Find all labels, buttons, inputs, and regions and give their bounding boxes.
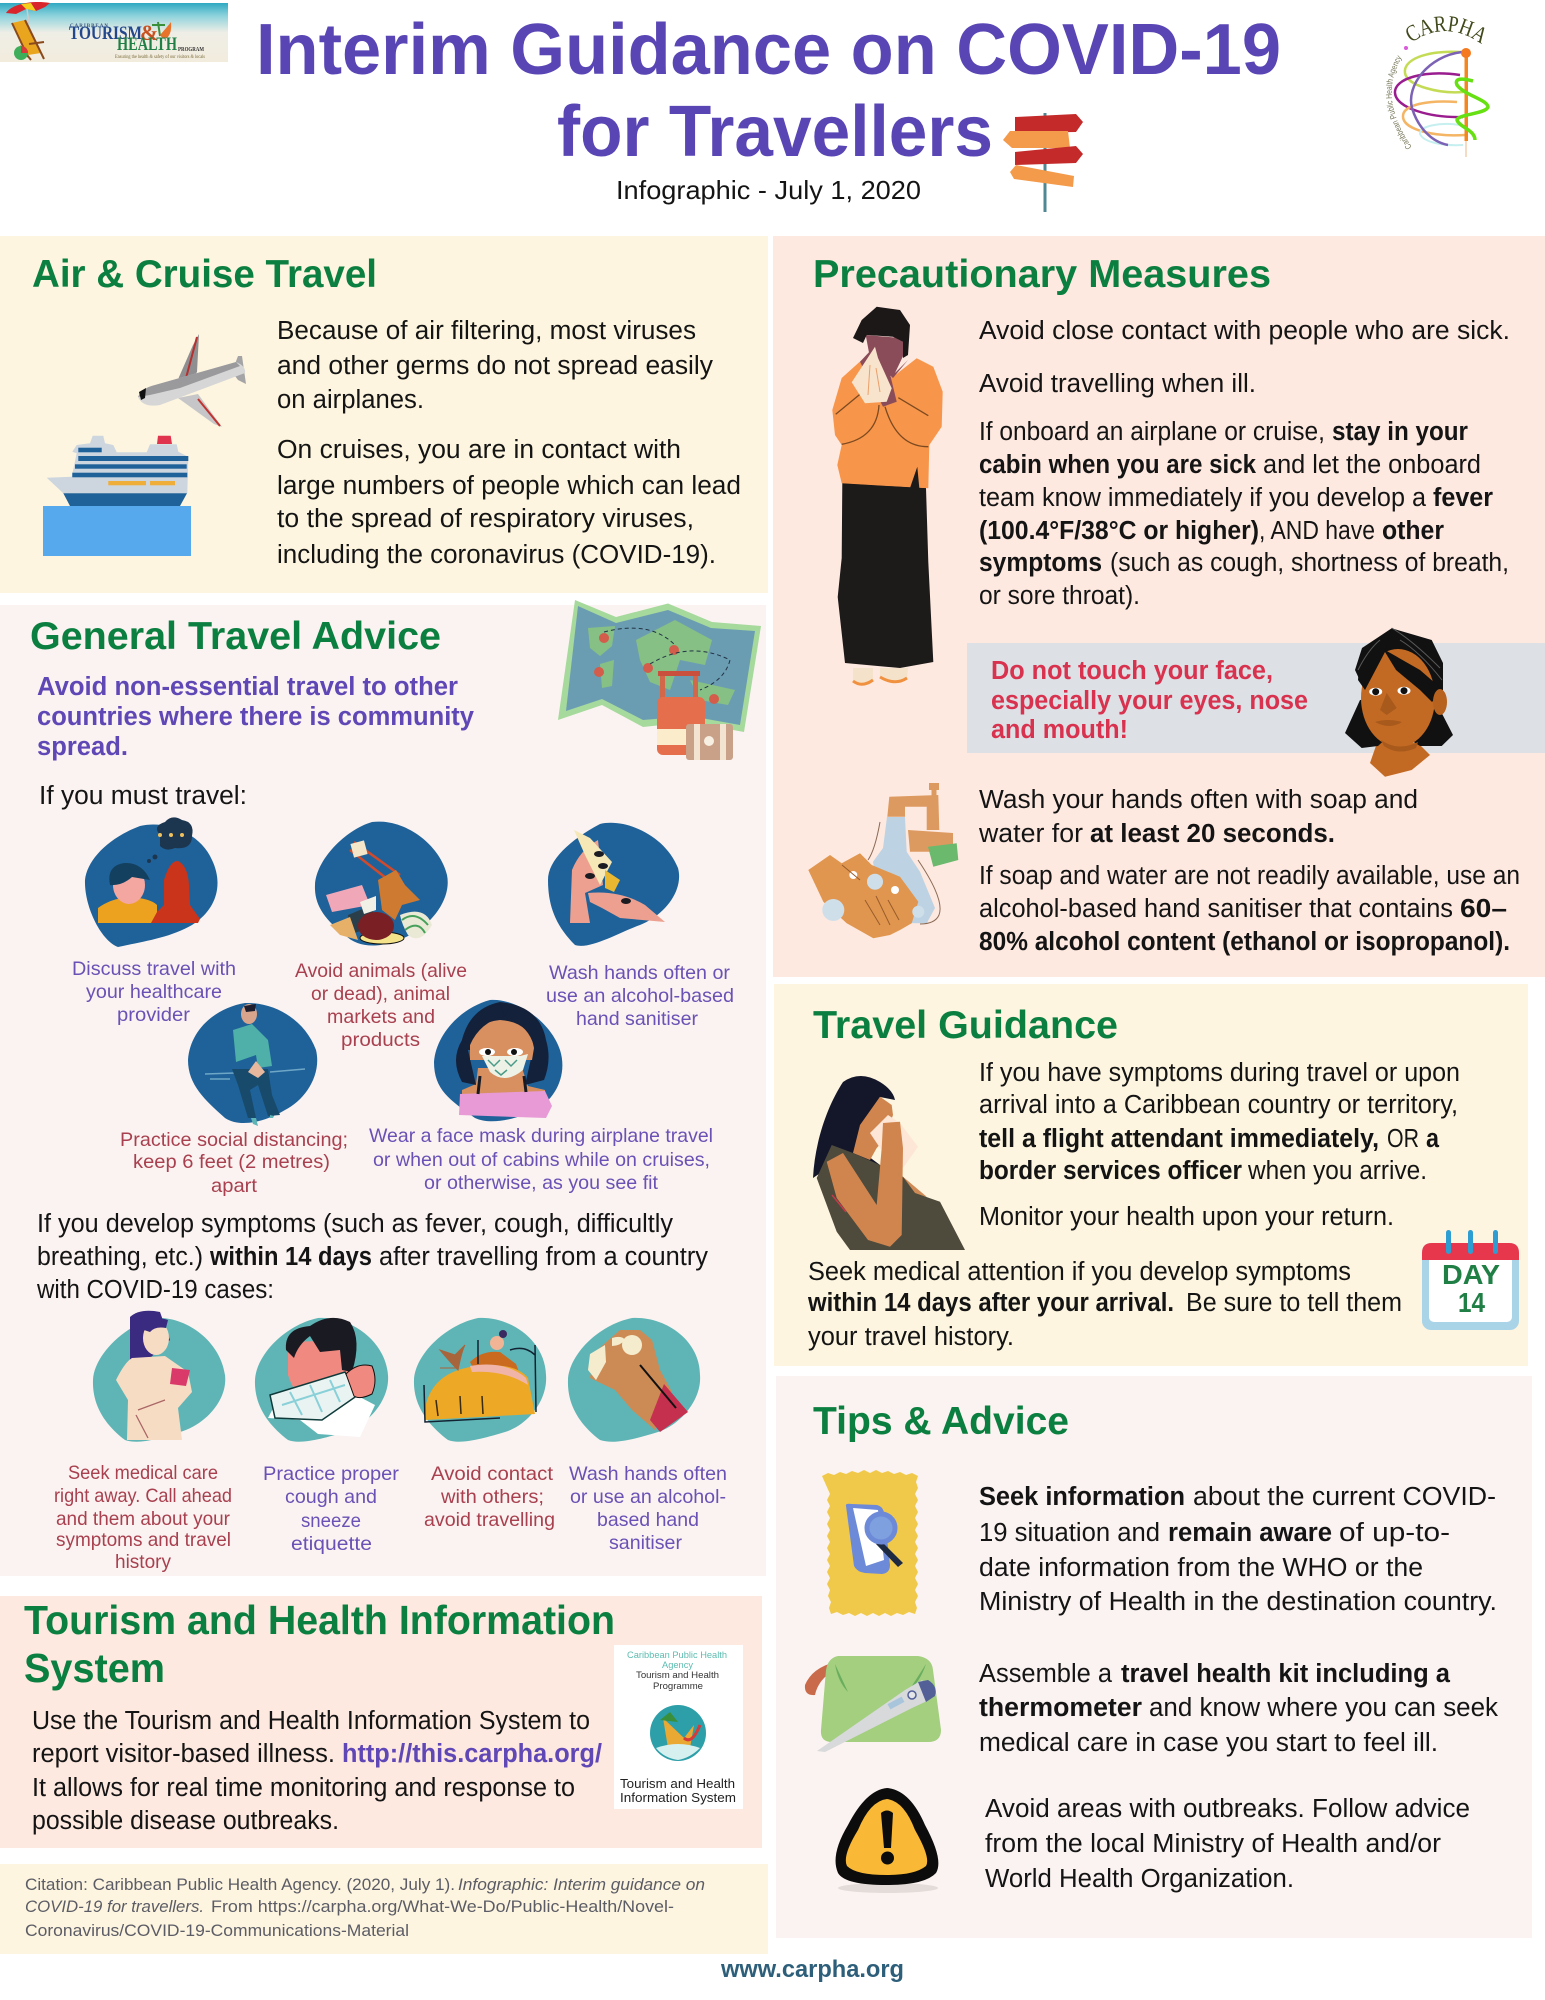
label: seek medical care bbox=[54, 1462, 232, 1573]
label: wash hands: Wash hands often or bbox=[549, 962, 731, 984]
panel: citation: Infographic: Interim guidance on bbox=[458, 1875, 705, 1894]
text: avoid non-essential travel bbox=[37, 673, 475, 761]
icon: woman face bbox=[1345, 628, 1453, 777]
heading bbox=[24, 1597, 615, 1691]
text: report illness: report visitor-based illness. bbox=[32, 1740, 335, 1768]
text: wash hands: water for bbox=[978, 820, 1084, 848]
text: health kit: and know where you can seek bbox=[1149, 1694, 1498, 1722]
text: if you must travel: If you must travel: bbox=[39, 782, 247, 810]
icon: wash hands sanitiser bbox=[548, 823, 679, 946]
panel: Travel Guidance bbox=[774, 984, 1528, 1366]
logo: CARPHA: CARPHA bbox=[1406, 16, 1484, 44]
text: symptoms during travel: when you arrive. bbox=[1247, 1157, 1427, 1185]
text: onboard advice: or sore throat). bbox=[979, 582, 1140, 610]
text: health kit bbox=[979, 1660, 1498, 1757]
text: seek information bbox=[979, 1483, 1497, 1616]
icon: warning sign bbox=[836, 1788, 938, 1893]
icon: social distancing bbox=[188, 1003, 317, 1126]
text: onboard advice: team know immediately if you develop a bbox=[979, 484, 1427, 512]
label: wash hands often: sanitiser bbox=[609, 1532, 682, 1554]
text: if you develop symptoms: after travelling from a country bbox=[379, 1243, 708, 1271]
text: sanitiser bbox=[979, 862, 1520, 956]
text: air filtering: on airplanes. bbox=[277, 386, 424, 414]
heading: Travel Guidance bbox=[813, 1004, 1118, 1047]
text: avoid outbreaks: World Health Organization. bbox=[985, 1865, 1294, 1893]
logo card: Tourism and Health Information System: Information System bbox=[620, 1790, 736, 1805]
icon: signpost bbox=[1003, 113, 1083, 212]
text: health kit: thermometer bbox=[979, 1694, 1142, 1722]
logo: Tourism and Health Program: Ensuring the health & safety of our visitors & locals bbox=[115, 55, 205, 60]
label: seek medical care: right away. Call ahead bbox=[54, 1485, 232, 1507]
label: avoid animals bbox=[295, 960, 467, 1051]
text: seek information: about the current COVID- bbox=[1193, 1483, 1496, 1511]
panel: citation: Citation: Caribbean Public Health Agency. (2020, July 1). bbox=[25, 1875, 455, 1894]
text: sanitiser: If soap and water are not readily available, use an bbox=[979, 862, 1520, 890]
text: if you develop symptoms: with COVID-19 cases: bbox=[36, 1276, 274, 1304]
heading: Precautionary Measures bbox=[813, 253, 1271, 296]
label: social distancing bbox=[120, 1129, 348, 1197]
label: discuss: provider bbox=[117, 1004, 191, 1026]
label: wash hands often: or use an alcohol- bbox=[570, 1486, 726, 1508]
text: onboard advice: , AND have bbox=[1259, 517, 1375, 545]
panel: Tourism and Health Information System bbox=[0, 1596, 762, 1848]
logo: Tourism and Health Program: PROGRAM bbox=[178, 47, 204, 53]
label: avoid animals: products bbox=[341, 1029, 420, 1051]
text: symptoms during travel: If you have symptoms during travel or upon bbox=[979, 1059, 1460, 1087]
text: onboard advice: cabin when you are sick bbox=[979, 451, 1257, 479]
label: wash hands often: based hand bbox=[597, 1509, 699, 1531]
panel: citation: Coronavirus/COVID-19-Communications-Material bbox=[25, 1921, 409, 1940]
callout: do not touch your face: and mouth! bbox=[991, 716, 1128, 744]
text: symptoms during travel bbox=[979, 1059, 1460, 1185]
label: face mask bbox=[369, 1125, 713, 1194]
icon: discuss with provider bbox=[85, 817, 218, 947]
icon: seek medical care bbox=[93, 1311, 225, 1442]
icon: person sneezing into tissue bbox=[832, 307, 943, 684]
icon: face mask bbox=[434, 1000, 562, 1121]
heading: Tourism and Health Information bbox=[24, 1597, 615, 1643]
label: wash hands: use an alcohol-based bbox=[546, 985, 734, 1007]
text: onboard advice bbox=[979, 418, 1509, 610]
label: seek medical care: history bbox=[115, 1551, 171, 1573]
text: if you develop symptoms bbox=[36, 1210, 708, 1304]
label: social distancing: Practice social distancing; bbox=[120, 1129, 348, 1151]
label: avoid contact: with others; bbox=[440, 1486, 544, 1508]
text: health kit: travel health kit including a bbox=[1121, 1660, 1451, 1688]
label: cough etiquette: sneeze bbox=[301, 1510, 361, 1532]
label: face mask: or when out of cabins while on cruises, bbox=[373, 1149, 710, 1171]
text: onboard advice: other bbox=[1382, 517, 1444, 545]
text: symptoms during travel: border services officer bbox=[979, 1157, 1242, 1185]
callout: do not touch your face: especially your eyes, nose bbox=[991, 687, 1308, 715]
text: seek information: of up-to- bbox=[1339, 1519, 1450, 1547]
logo card: Tourism and Health Information System: Caribbean Public Health bbox=[627, 1650, 727, 1661]
text: if you develop symptoms: If you develop symptoms (such as fever, cough, difficultly bbox=[37, 1210, 673, 1238]
label: avoid animals: or dead), animal bbox=[311, 983, 450, 1005]
panel: citation: COVID-19 for travellers. bbox=[25, 1897, 204, 1916]
icon: day 14 calendar bbox=[1422, 1230, 1519, 1330]
icon: phone and magnifier bbox=[822, 1470, 918, 1616]
text: seek information: 19 situation and bbox=[979, 1519, 1160, 1547]
text: sanitiser: 60– bbox=[1460, 895, 1507, 923]
label: discuss: Discuss travel with bbox=[72, 958, 236, 980]
label: avoid contact: avoid travelling bbox=[424, 1509, 555, 1531]
panel: General Travel Advice bbox=[0, 600, 766, 1576]
panel: Air & Cruise Travel bbox=[0, 236, 768, 593]
text: seek information: Ministry of Health in the destination country. bbox=[979, 1588, 1497, 1616]
text: seek information: remain aware bbox=[1168, 1519, 1332, 1547]
text: cruises: to the spread of respiratory viruses, bbox=[277, 505, 694, 533]
heading: System bbox=[24, 1645, 165, 1691]
label: seek medical care: Seek medical care bbox=[68, 1462, 218, 1484]
text: cruises: including the coronavirus (COVID-19). bbox=[277, 541, 716, 569]
logo: Tourism and Health Program bbox=[0, 2, 228, 62]
logo: CARPHA: Caribbean Public Health Agency bbox=[1386, 55, 1411, 150]
logo: CARPHA bbox=[1386, 16, 1490, 157]
panel: Tips & Advice bbox=[776, 1376, 1532, 1938]
label: cough etiquette: cough and bbox=[285, 1486, 377, 1508]
heading: Tips & Advice bbox=[813, 1400, 1069, 1443]
text: health kit: Assemble a bbox=[979, 1660, 1113, 1688]
callout: do not touch your face bbox=[967, 643, 1545, 753]
text: health kit: medical care in case you start to feel ill. bbox=[979, 1729, 1438, 1757]
text: monitor health: Monitor your health upon your return. bbox=[979, 1203, 1394, 1231]
text: sanitiser: alcohol-based hand sanitiser that contains bbox=[979, 895, 1453, 923]
text: seek medical attention: your travel history. bbox=[808, 1323, 1014, 1351]
text: if you develop symptoms: within 14 days bbox=[209, 1243, 372, 1271]
icon: cruise ship bbox=[47, 436, 188, 506]
label: wash hands bbox=[546, 962, 734, 1030]
text: cruises bbox=[277, 436, 741, 569]
logo card: Tourism and Health Information System bbox=[614, 1645, 743, 1809]
text: seek medical attention: Seek medical attention if you develop symptoms bbox=[808, 1258, 1351, 1286]
text: symptoms during travel: a bbox=[1426, 1125, 1440, 1153]
panel: citation bbox=[0, 1864, 768, 1954]
text: avoid outbreaks: from the local Ministry of Health and/or bbox=[985, 1830, 1442, 1858]
label: social distancing: keep 6 feet (2 metres) bbox=[133, 1151, 330, 1173]
heading: General Travel Advice bbox=[30, 615, 441, 658]
text: report illness: It allows for real time monitoring and response to bbox=[32, 1774, 575, 1802]
text: avoid non-essential travel: spread. bbox=[37, 733, 128, 761]
label: face mask: Wear a face mask during airplane travel bbox=[369, 1125, 713, 1147]
label: avoid contact bbox=[424, 1463, 555, 1531]
text: report illness bbox=[32, 1707, 602, 1835]
logo card: Tourism and Health Information System: Agency bbox=[662, 1660, 693, 1671]
label: wash hands often: Wash hands often bbox=[569, 1463, 727, 1485]
text: seek medical attention bbox=[807, 1258, 1402, 1351]
icon: sea bbox=[43, 506, 191, 556]
text: symptoms during travel: OR bbox=[1387, 1125, 1419, 1153]
label: wash hands often bbox=[569, 1463, 727, 1554]
label: cough etiquette: etiquette bbox=[291, 1533, 372, 1555]
text: air filtering bbox=[277, 317, 713, 414]
text: report illness: possible disease outbreaks. bbox=[32, 1807, 339, 1835]
logo card: Tourism and Health Information System: Tourism and Health bbox=[636, 1670, 719, 1681]
text: sanitiser: 80% alcohol content (ethanol or isopropanol). bbox=[979, 928, 1510, 956]
icon: avoid animals bbox=[315, 822, 448, 946]
text: wash hands: Wash your hands often with soap and bbox=[979, 786, 1418, 814]
logo: Tourism and Health Program: HEALTH bbox=[117, 34, 177, 55]
text: avoid outbreaks: Avoid areas with outbreaks. Follow advice bbox=[985, 1795, 1470, 1823]
logo: Tourism and Health Program: & bbox=[140, 20, 158, 45]
icon: day 14 calendar: DAY bbox=[1442, 1259, 1500, 1290]
label: avoid contact: Avoid contact bbox=[431, 1463, 554, 1485]
icon: travel health kit with thermometer bbox=[805, 1656, 941, 1752]
text: symptoms during travel: arrival into a Caribbean country or territory, bbox=[979, 1091, 1458, 1119]
text: cruises: On cruises, you are in contact with bbox=[277, 436, 681, 464]
text: avoid travel: Avoid travelling when ill. bbox=[979, 370, 1256, 398]
heading: Air & Cruise Travel bbox=[32, 253, 377, 296]
label: avoid animals: Avoid animals (alive bbox=[295, 960, 467, 982]
text: onboard advice: symptoms bbox=[979, 549, 1102, 577]
label: face mask: or otherwise, as you see fit bbox=[424, 1172, 659, 1194]
subtitle: date: Infographic - July 1, 2020 bbox=[616, 175, 921, 205]
text: wash hands: at least 20 seconds. bbox=[1090, 820, 1335, 848]
label: cough etiquette bbox=[263, 1463, 400, 1555]
label: discuss bbox=[72, 958, 236, 1026]
label: wash hands: hand sanitiser bbox=[576, 1008, 698, 1030]
icon: world map and suitcases bbox=[558, 600, 761, 760]
label: discuss: your healthcare bbox=[86, 981, 222, 1003]
text: avoid non-essential travel: Avoid non-essential travel to other bbox=[37, 673, 458, 701]
text: report illness: Use the Tourism and Health Information System to bbox=[32, 1707, 590, 1735]
text: seek medical attention: within 14 days after your arrival. bbox=[807, 1289, 1174, 1317]
panel: Precautionary Measures bbox=[773, 236, 1545, 977]
text: onboard advice: and let the onboard bbox=[1263, 451, 1481, 479]
label: cough etiquette: Practice proper bbox=[263, 1463, 400, 1485]
label: seek medical care: symptoms and travel bbox=[56, 1529, 231, 1551]
icon: cough etiquette bbox=[255, 1318, 388, 1442]
text: air filtering: and other germs do not spread easily bbox=[277, 352, 713, 380]
text: onboard advice: If onboard an airplane or cruise, bbox=[979, 418, 1325, 446]
text: seek medical attention: Be sure to tell them bbox=[1186, 1289, 1402, 1317]
icon: avoid contact in bed bbox=[414, 1318, 546, 1442]
text: seek information: Seek information bbox=[979, 1483, 1185, 1511]
title: for Travellers bbox=[557, 92, 993, 172]
text: avoid outbreaks bbox=[985, 1795, 1470, 1893]
title: Interim Guidance on COVID-19 bbox=[256, 10, 1281, 90]
logo card: Tourism and Health Information System: Tourism and Health bbox=[620, 1776, 735, 1791]
icon: hand washing bbox=[808, 783, 958, 938]
icon: airplane bbox=[138, 334, 246, 427]
text: symptoms during travel: tell a flight attendant immediately, bbox=[979, 1125, 1379, 1153]
text: report illness: http://this.carpha.org/ bbox=[342, 1740, 602, 1768]
text: onboard advice: (such as cough, shortness of breath, bbox=[1110, 549, 1509, 577]
text: onboard advice: fever bbox=[1433, 484, 1493, 512]
title bbox=[256, 10, 1281, 172]
text: seek information: date information from the WHO or the bbox=[979, 1554, 1423, 1582]
label: seek medical care: and them about your bbox=[56, 1508, 230, 1530]
logo: Tourism and Health Program: TOURISM bbox=[69, 23, 142, 44]
icon: day 14 calendar: 14 bbox=[1458, 1287, 1485, 1318]
icon: wash hands with soap bbox=[568, 1318, 700, 1442]
text: cruises: large numbers of people which can lead bbox=[277, 472, 741, 500]
text: if you develop symptoms: breathing, etc.) bbox=[37, 1243, 203, 1271]
text: onboard advice: stay in your bbox=[1332, 418, 1468, 446]
label: avoid animals: markets and bbox=[327, 1006, 435, 1028]
text: wash hands bbox=[978, 786, 1418, 848]
text: air filtering: Because of air filtering, most viruses bbox=[277, 317, 696, 345]
panel: citation: From https://carpha.org/What-We-Do/Public-Health/Novel- bbox=[211, 1897, 674, 1916]
label: social distancing: apart bbox=[211, 1175, 258, 1197]
text: onboard advice: (100.4°F/38°C or higher) bbox=[979, 517, 1259, 545]
footer: website: www.carpha.org bbox=[720, 1956, 904, 1983]
logo: Tourism and Health Program: CARIBBEAN bbox=[70, 24, 108, 29]
logo card: Tourism and Health Information System: Programme bbox=[653, 1681, 703, 1692]
text: avoid non-essential travel: countries where there is community bbox=[37, 703, 475, 731]
text: avoid contact: Avoid close contact with people who are sick. bbox=[979, 317, 1510, 345]
callout: do not touch your face: Do not touch your face, bbox=[991, 657, 1273, 685]
icon: woman sneezing bbox=[813, 1076, 965, 1250]
